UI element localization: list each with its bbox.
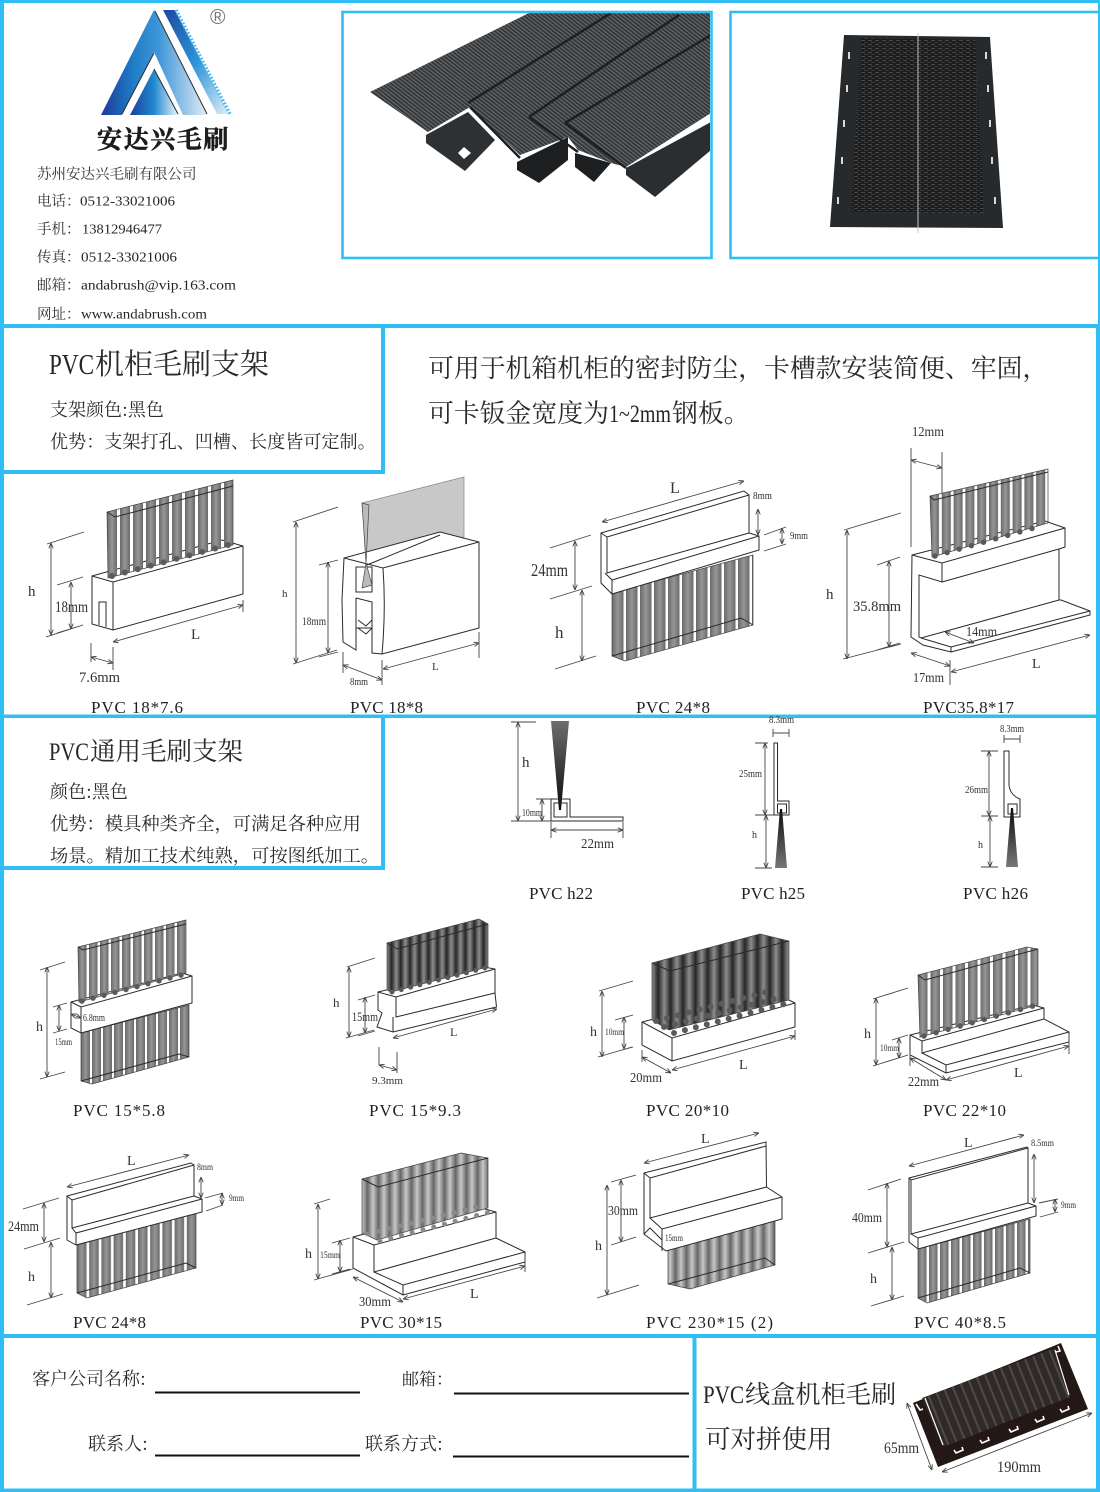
caption: PVC 15*9.3 — [369, 1101, 461, 1120]
diagram: PVC 20*10: h — [590, 1025, 597, 1040]
bracket advantages: 优势：支架打孔、凹槽、长度皆可定制。 — [50, 428, 376, 454]
caption: PVC 230*15 (2) — [646, 1313, 773, 1332]
caption: PVC 24*8 — [636, 698, 710, 717]
diagram: PVC 230*15 (2): 30mm — [608, 1204, 638, 1219]
caption: PVC 20*10 — [646, 1101, 729, 1120]
heading: PVC — [49, 349, 94, 381]
company contact details: 13812946477 — [82, 222, 162, 238]
diagram: PVC 24*8: h — [555, 623, 564, 642]
company contact details: 电话： — [37, 190, 80, 211]
diagram: PVC 30*15 — [305, 1153, 525, 1332]
heading: PVC — [49, 739, 89, 766]
diagram: PVC 20*10: 20mm — [630, 1071, 662, 1086]
diagram: PVC h22: h — [522, 755, 530, 771]
diagram: PVC 24*8 small: 8mm — [197, 1162, 213, 1172]
bracket advantages — [50, 810, 379, 868]
diagram: PVC 18*8 — [282, 477, 479, 717]
diagram: PVC 24*8 small — [8, 1154, 244, 1332]
form: customer details: 联系方式: — [365, 1430, 443, 1456]
company contact details: 邮箱： — [37, 274, 80, 295]
diagram: PVC 18*8: L — [432, 661, 439, 673]
form: customer details — [32, 1365, 689, 1458]
wire box brush drawing — [884, 1343, 1092, 1476]
panel: PVC wire box cabinet brush — [703, 1343, 1092, 1476]
description text: 钢板。 — [672, 393, 750, 430]
icon: company logo — [101, 6, 230, 115]
diagram: PVC h22: 22mm — [581, 837, 614, 852]
diagram: PVC h22 — [511, 721, 623, 903]
diagram: PVC 22*10: 22mm — [908, 1075, 939, 1090]
diagram: PVC 30*15: L — [470, 1287, 479, 1302]
diagram: PVC 15*9.3: h — [333, 995, 340, 1010]
diagram: PVC 15*5.8: h — [36, 1020, 43, 1035]
diagram: PVC 230*15 (2): L — [701, 1132, 710, 1147]
bracket advantages: 优势：模具种类齐全，可满足各种应用 — [50, 810, 361, 836]
diagram: PVC 15*9.3: 15mm — [352, 1009, 378, 1024]
caption: PVC 24*8 — [73, 1313, 146, 1332]
description text: 可用于机箱机柜的密封防尘，卡槽款安装简便、牢固， — [428, 348, 1048, 385]
diagram: PVC 22*10: L — [1014, 1066, 1023, 1081]
diagram: PVC 24*8 small: 24mm — [8, 1219, 39, 1235]
diagram: PVC 24*8: 8mm — [753, 490, 772, 502]
brand name: 安达兴毛刷 — [97, 120, 230, 156]
company contact details: 网址： — [37, 303, 80, 324]
diagram: PVC 24*8 — [531, 480, 808, 717]
heading: 机柜毛刷支架 — [95, 342, 269, 383]
diagram: PVC 230*15 (2) — [595, 1132, 782, 1332]
diagram: PVC 24*8: 24mm — [531, 560, 568, 580]
caption: PVC35.8*17 — [923, 698, 1014, 717]
company contact details: 0512-33021006 — [80, 194, 175, 210]
diagram: PVC 15*5.8: 6.8mm — [83, 1013, 105, 1024]
diagram: PVC 40*8.5: L — [964, 1136, 973, 1151]
diagram: PVC 40*8.5: 8.5mm — [1031, 1138, 1054, 1148]
wire box brush drawing: 190mm — [997, 1459, 1041, 1476]
caption: PVC 18*7.6 — [91, 698, 183, 717]
company contact details: andabrush@vip.163.com — [81, 278, 236, 294]
form: customer details: 邮箱： — [402, 1365, 453, 1390]
heading: 通用毛刷支架 — [90, 732, 243, 768]
diagram: PVC h26: 26mm — [965, 785, 988, 796]
caption: PVC h26 — [963, 884, 1028, 903]
icon: company logo: ® — [210, 6, 226, 29]
company contact details: 传真： — [37, 246, 80, 267]
diagram: PVC 18*7.6: 18mm — [55, 599, 88, 616]
diagram: PVC 24*8: L — [670, 480, 680, 497]
diagram: PVC 15*5.8 — [36, 920, 192, 1120]
diagram: PVC 30*15: h — [305, 1247, 312, 1262]
diagram: PVC 230*15 (2): 15mm — [665, 1233, 683, 1243]
diagram: PVC h25: 8.3mm — [769, 715, 794, 726]
diagram: PVC 24*8 small: 9mm — [229, 1193, 244, 1203]
diagram: PVC h26 — [963, 724, 1028, 903]
diagram: PVC 20*10: 10mm — [605, 1027, 624, 1037]
form: customer details: 客户公司名称: — [32, 1365, 146, 1391]
diagram: PVC35.8*17: 35.8mm — [853, 599, 901, 615]
company contact details — [37, 163, 236, 324]
company contact details: 0512-33021006 — [81, 250, 177, 266]
diagram: PVC 40*8.5 — [852, 1135, 1076, 1332]
subheading: 可对拼使用 — [705, 1420, 833, 1456]
heading: 线盒机柜毛刷 — [745, 1375, 896, 1411]
caption: PVC 18*8 — [350, 698, 423, 717]
diagram: PVC 30*15: 30mm — [359, 1295, 391, 1310]
caption: PVC h22 — [529, 884, 593, 903]
diagram: PVC 20*10 — [590, 934, 795, 1120]
diagram: PVC 18*7.6: h — [28, 584, 36, 600]
bracket colour: 颜色:黑色 — [50, 778, 128, 804]
diagram: PVC35.8*17: 17mm — [913, 671, 944, 686]
company header — [37, 6, 236, 324]
diagram: PVC h22: 10mm — [522, 808, 542, 819]
diagram: PVC35.8*17: 14mm — [966, 625, 997, 640]
diagram: PVC35.8*17: h — [826, 587, 834, 603]
photo: cabinet brush panel — [730, 12, 1100, 258]
diagram: PVC 22*10: h — [864, 1027, 871, 1042]
caption: PVC 22*10 — [923, 1101, 1006, 1120]
diagram: PVC 15*9.3: 9.3mm — [372, 1075, 403, 1087]
diagram: PVC 24*8 small: h — [28, 1270, 35, 1285]
caption: PVC h25 — [741, 884, 805, 903]
company contact details: 手机： — [37, 218, 80, 239]
diagram: PVC 40*8.5: 9mm — [1061, 1200, 1076, 1210]
diagram: PVC35.8*17: L — [1032, 657, 1041, 672]
diagram: PVC 18*7.6: 7.6mm — [79, 670, 120, 686]
bracket advantages: 场景。精加工技术纯熟，可按图纸加工。 — [50, 842, 379, 868]
diagram: PVC 40*8.5: h — [870, 1272, 877, 1287]
diagram: PVC h25: 25mm — [739, 769, 762, 780]
diagram: PVC 15*9.3: L — [450, 1025, 457, 1039]
caption: PVC 15*5.8 — [73, 1101, 165, 1120]
diagram: PVC 15*5.8: 15mm — [55, 1037, 72, 1047]
diagram: PVC 40*8.5: 40mm — [852, 1211, 882, 1226]
description text — [428, 348, 1048, 430]
diagram: PVC 18*7.6 — [28, 480, 243, 717]
form: customer details: 联系人: — [88, 1430, 148, 1456]
caption: PVC 30*15 — [360, 1313, 442, 1332]
panel: PVC cabinet brush bracket — [49, 342, 376, 454]
diagram: PVC 18*8: 8mm — [350, 677, 368, 688]
wire box brush drawing: 65mm — [884, 1440, 919, 1457]
diagram: PVC 22*10 — [864, 947, 1069, 1120]
diagram: PVC 15*9.3 — [333, 919, 497, 1120]
diagram: PVC 24*8 small: L — [127, 1154, 136, 1169]
diagram: PVC 30*15: 15mm — [320, 1250, 340, 1260]
description text: 可卡钣金宽度为 — [428, 393, 609, 430]
diagram: PVC h26: 8.3mm — [1000, 724, 1024, 735]
caption: PVC 40*8.5 — [914, 1313, 1006, 1332]
panel: PVC general brush bracket — [49, 732, 379, 868]
bracket colour: 支架颜色:黑色 — [50, 396, 164, 422]
diagram: PVC 20*10: L — [739, 1058, 748, 1073]
photo: brush strips — [342, 12, 712, 258]
company contact details: 苏州安达兴毛刷有限公司 — [37, 163, 196, 184]
diagram: PVC 18*8: 18mm — [302, 614, 327, 628]
diagram: PVC 230*15 (2): h — [595, 1239, 602, 1254]
description text: 1~2mm — [609, 401, 671, 428]
diagram: PVC35.8*17 — [826, 425, 1090, 717]
diagram: PVC h25: h — [752, 830, 757, 841]
diagram: PVC h25 — [739, 715, 805, 903]
diagram: PVC 24*8: 9mm — [790, 530, 808, 542]
diagram: PVC h26: h — [978, 840, 983, 851]
diagram: PVC 18*8: h — [282, 588, 288, 600]
diagram: PVC 22*10: 10mm — [880, 1043, 899, 1053]
diagram: PVC 18*7.6: L — [191, 627, 200, 643]
diagram: PVC35.8*17: 12mm — [912, 425, 944, 440]
company contact details: www.andabrush.com — [81, 308, 207, 322]
heading: PVC — [703, 1382, 744, 1409]
